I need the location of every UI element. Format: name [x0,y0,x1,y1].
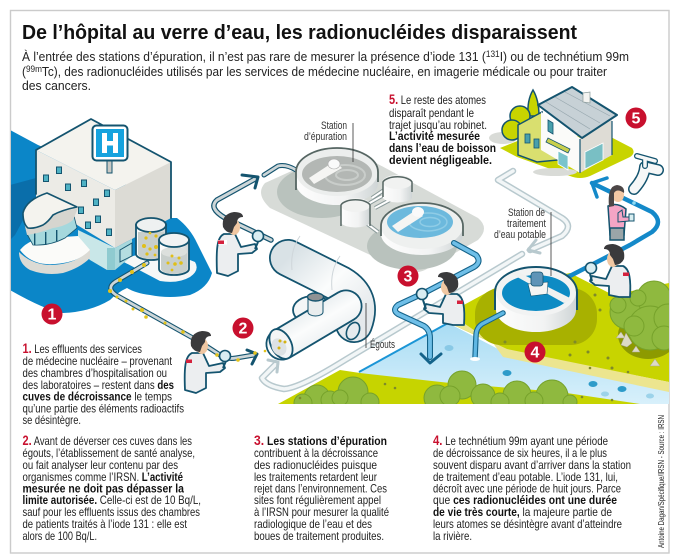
purification tank 2 [381,203,463,255]
left wall [36,150,115,248]
gable wing [518,112,558,162]
badge 4: 4 [531,344,540,362]
text block 4: 4. Le technétium 99m ayant une période [433,432,608,448]
chimney [583,92,590,103]
sewer pipes [265,236,362,363]
intro text [22,49,629,93]
purification tanks [296,148,463,255]
intro text: Tc), des radionucléides utilisés par les services de médecine nucléaire, en imagerie médicale ou pour traiter [42,64,608,79]
rotunda base [20,236,90,264]
label: égouts: Égouts [370,338,395,351]
text block 5: devient négligeable. [389,153,492,167]
small tank A [382,175,412,202]
pale arrow from house [498,171,568,253]
source credit: Antoine Dagan/Spécifique/IRSN - Source : IRSN [657,415,666,548]
text block 5: disparaît pendant le [389,106,474,120]
station platform [261,164,484,272]
label: station de traitement [494,207,546,241]
label: station de traitement: traitement [507,218,546,230]
blue pipe to house [566,178,658,278]
river and banks [278,273,669,404]
text block 3: radiologique de l’eau et des [254,517,372,531]
text block 1: se désintègre. [22,413,81,427]
grey wall [580,120,612,173]
intro text: I) ou de technétium 99m [500,49,629,64]
leader lines [353,123,551,348]
icon: tap [634,156,658,189]
far bank [449,273,669,382]
text block 5: 5. Le reste des atomes [389,91,486,107]
roof [538,87,617,138]
text block 3: 3. Les stations d’épuration [254,432,387,448]
lateral tube [282,306,346,344]
pale road to arrow 2 [262,254,522,389]
intro text: 99m [26,64,42,74]
text block 3: à l’IRSN pour mesurer la qualité [254,505,389,519]
text block 2: ou fait analyser leur contenu par des [22,458,178,472]
fish [444,345,654,398]
entrance glass [78,230,115,270]
label: station d'épuration: Station [321,120,347,132]
decay tanks [136,218,189,275]
small pipes [362,190,390,232]
outlet pipe [470,313,503,361]
right wall [115,162,171,248]
blue pipe from station 3 [395,243,479,363]
text block 1: des laboratoires – restent dans des [22,378,174,392]
text block 1: 1. Les effluents des services [22,340,142,356]
hospital ground [10,130,212,313]
label: station de traitement: d’eau potable [494,229,546,241]
trees [502,90,539,140]
badge 2 [232,318,254,338]
text block 3 [254,432,389,543]
text block 3: contribuent à la décroissance [254,446,378,460]
person: inspector 3 [416,272,464,325]
label: station d'épuration: d’épuration [304,131,347,143]
text block 5: dans l’eau de boisson [389,141,496,155]
badge 5: 5 [632,110,641,128]
text block 4: décroît avec une période de huit jours. Parce [433,482,621,496]
badge 5 [626,108,646,128]
person: woman [608,185,634,240]
small tank B [340,198,370,227]
text block 2 [22,432,201,543]
tank 2 [159,233,189,275]
white wall [541,112,580,173]
illustration [10,87,680,412]
person: inspector 4 [586,244,630,297]
text block 1: cuves de décroissance le temps [22,390,172,404]
intro text: des cancers. [22,78,91,93]
tank 1 [136,218,166,260]
text block 4: de décroissance de six heures, il a le plus [433,446,607,460]
grey pipe and arrow to station [214,166,296,240]
text block 4 [433,432,631,543]
text block 4: que ces radionucléides ont une durée [433,493,617,507]
badge 4 [524,342,546,362]
text block 4: leurs atomes se désintègre avant d’atteindre [433,517,622,531]
text block 5 [389,91,496,167]
label: station d'épuration [304,120,347,143]
text block 2: de patients traités à l’iode 131 : elle est [22,517,188,531]
text block 2: égouts, l’établissement de santé analyse, [22,446,195,460]
house [489,87,634,178]
tee saddle [293,296,333,324]
windows [44,167,112,236]
person: inspector 2 [185,331,230,393]
intro text: À l’entrée des stations d’épuration, il n’est pas rare de mesurer la présence d’iode 131 ( [22,49,525,64]
text block 4: souvent disparu avant d’arriver dans la station [433,458,631,472]
drinking water tank [495,267,577,332]
text block 2: mesurée ne doit pas dépasser la [22,482,184,496]
text block 3: sites font régulièrement appel [254,493,381,507]
text block 1 [22,340,184,427]
badge 2: 2 [239,320,248,338]
text block 5: trajet jusqu’au robinet. [389,118,487,132]
text block 5: L’activité mesurée [389,129,480,143]
badge 1: 1 [48,306,57,324]
text block 1: des chambres d’hospitalisation ou [22,366,167,380]
tube mouth [265,325,297,363]
text block 1: qu’une partie des éléments radioactifs [22,402,184,416]
badge 1 [42,304,62,324]
title: De l’hôpital au verre d’eau, les radionucléides disparaissent [22,22,577,44]
text block 2: limite autorisée. Celle-ci est de 10 Bq/L, [22,493,201,507]
text block 4: de traitement d’eau potable. L’iode 131, lui, [433,470,618,484]
manhole [308,297,323,316]
purification tank 1 [296,148,378,205]
upper tube [288,258,357,324]
label: station de traitement: Station de [508,207,545,219]
text block 4: la rivière. [433,529,472,543]
text block 1: de médecine nucléaire – provenant [22,354,173,368]
top face [36,119,171,190]
intro text: ( [22,64,26,79]
shrubs near bank [294,371,577,412]
person: inspector 1 [217,212,264,276]
text block 3: les traitements retardent leur [254,470,377,484]
shrubs far bank [610,281,680,359]
text block 2: 2. Avant de déverser ces cuves dans les [22,432,192,448]
text block 3: des radionucléides puisque [254,458,377,472]
near bank [278,370,640,404]
badge 3 [398,266,418,286]
rocks [616,332,660,366]
bank edge [455,324,669,392]
effluent pipe with dots [108,263,266,364]
tank base [124,255,197,282]
rotunda top [23,193,77,228]
hospital [19,119,171,274]
bank specks [299,294,629,401]
icon: hospital sign [92,126,128,173]
text block 4: de vie très courte, la majeure partie de [433,505,612,519]
river [340,323,669,404]
text block 3: boues de traitement produites. [254,529,384,543]
rotunda glass [27,216,77,245]
text block 3: rejet dans l’environnement. Ces [254,482,387,496]
rotunda wall [24,208,78,235]
intro text: 131 [486,49,500,59]
text block 2: sauf pour les effluents issus des chambres [22,505,200,519]
bushes [294,281,680,412]
garden [500,134,634,178]
text block 2: alors de 100 Bq/L. [22,529,97,543]
tank shadow [475,288,597,345]
badge 3: 3 [404,268,413,286]
text block 2: organismes comme l’IRSN. L’activité [22,470,183,484]
